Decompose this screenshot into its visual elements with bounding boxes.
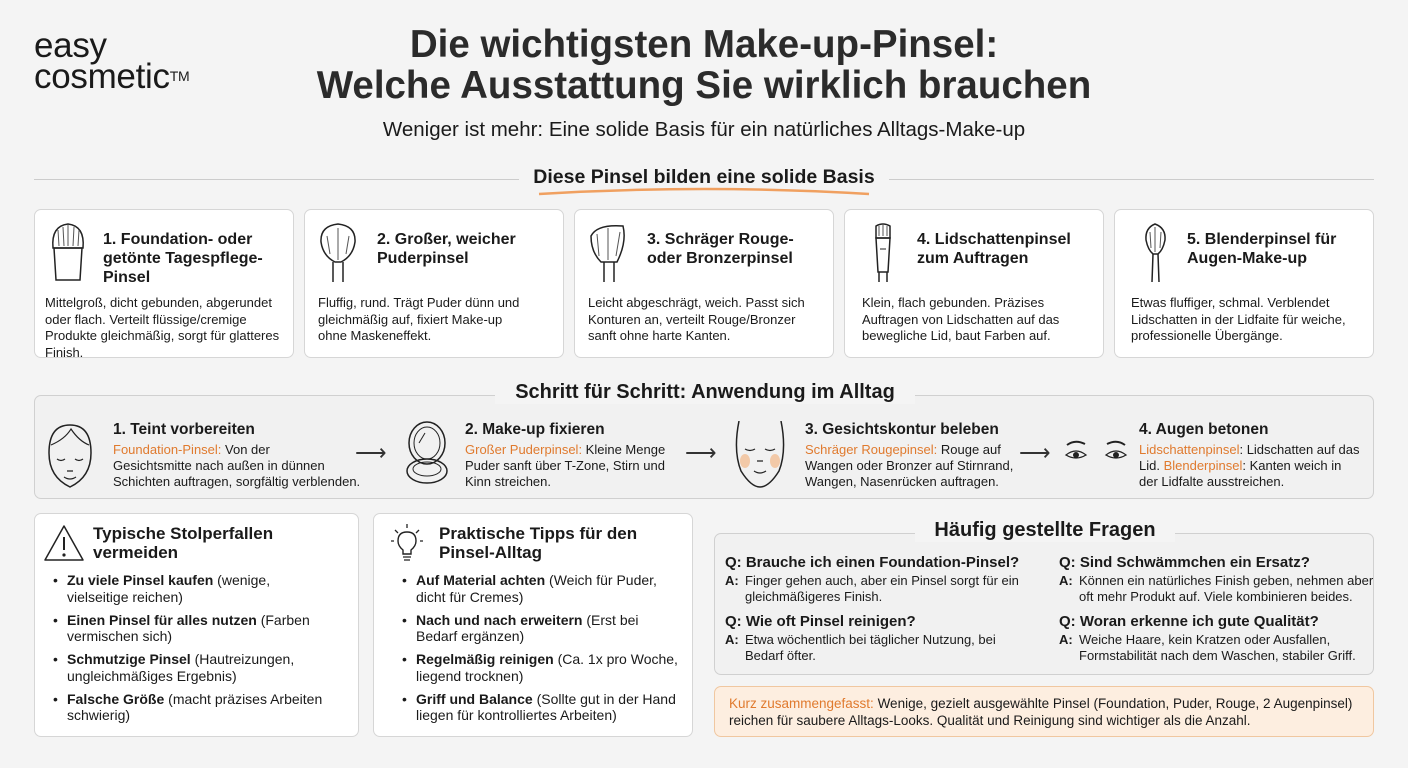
card 5: 5. Blenderpinsel für — [1187, 231, 1336, 248]
panel: tipps: Regelmäßig reinigen (Ca. 1x pro Woche, — [416, 651, 678, 667]
title: Welche Ausstattung Sie wirklich brauchen — [317, 64, 1091, 107]
step 1: 1. Teint vorbereiten — [113, 421, 255, 438]
arrow: ⟶ — [1019, 440, 1051, 465]
step 4: Lidschattenpinsel: Lidschatten auf das — [1139, 442, 1359, 457]
card 2 — [304, 209, 564, 358]
card 3 — [574, 209, 834, 358]
card 4 — [844, 209, 1104, 358]
step 3: Wangen oder Bronzer auf Stirnrand, — [805, 458, 1013, 473]
panel: FAQ — [714, 533, 1374, 675]
card 3: sanft ohne harte Kanten. — [588, 328, 730, 343]
icon: blender brush — [1145, 223, 1166, 282]
panel: tipps: liegend trocknen) — [416, 668, 523, 684]
step 4: Lid. Blenderpinsel: Kanten weich in — [1139, 458, 1341, 473]
summary callout: reichen für saubere Alltags-Looks. Qualität und Reinigung sind wichtiger als die Anzahl. — [729, 713, 1251, 728]
FAQ 4: Q: Woran erkenne ich gute Qualität? — [1059, 613, 1319, 630]
step 1: Foundation-Pinsel: Von der — [113, 442, 270, 457]
FAQ 4: Weiche Haare, kein Kratzen oder Ausfallen, — [1079, 632, 1330, 647]
step 1: Gesichtsmitte nach außen in dünnen — [113, 458, 325, 473]
panel: tipps: liegen für kontrolliertes Arbeiten) — [416, 707, 617, 723]
FAQ 3: Q: Sind Schwämmchen ein Ersatz? — [1059, 554, 1310, 571]
arrow: ⟶ — [355, 440, 387, 465]
card 3: Leicht abgeschrägt, weich. Passt sich — [588, 295, 805, 310]
step 3 — [736, 421, 1013, 489]
panel: stolperfallen: vielseitige reichen) — [67, 588, 183, 604]
card 1: Produkte gleichmäßig, sorgt für glatteres — [45, 328, 279, 343]
FAQ 2: Q: Wie oft Pinsel reinigen? — [725, 613, 916, 630]
FAQ 2 — [725, 613, 996, 662]
step 1: Schichten auftragen, sorgfältig verblenden. — [113, 474, 360, 489]
FAQ 2: A: — [725, 632, 739, 647]
card 4: zum Auftragen — [917, 250, 1028, 267]
panel: stolperfallen: Typische Stolperfallen — [93, 524, 273, 543]
card 1: 1. Foundation- oder — [103, 231, 252, 248]
summary callout — [714, 686, 1374, 737]
card 5: professionelle Übergänge. — [1131, 328, 1283, 343]
card 3: oder Bronzerpinsel — [647, 250, 793, 267]
FAQ 3 — [1059, 554, 1373, 604]
card 3: 3. Schräger Rouge- — [647, 231, 794, 248]
step 3: Wangen, Nasenrücken auftragen. — [805, 474, 999, 489]
FAQ 4: Formstabilität nach dem Waschen, stabiler Griff. — [1079, 648, 1356, 662]
panel: stolperfallen: Zu viele Pinsel kaufen (wenige, — [67, 572, 270, 588]
FAQ 1: Q: Brauche ich einen Foundation-Pinsel? — [725, 554, 1019, 571]
section heading: Basis: Diese Pinsel bilden eine solide Basis — [533, 166, 875, 188]
card 4: Klein, flach gebunden. Präzises — [862, 295, 1044, 310]
FAQ 3: A: — [1059, 573, 1073, 588]
panel: tipps: Nach und nach erweitern (Erst bei — [416, 612, 638, 628]
panel: stolperfallen — [34, 513, 359, 737]
icon: angled brush — [590, 225, 625, 282]
FAQ 1 — [725, 554, 1019, 604]
card 2: Fluffig, rund. Trägt Puder dünn und — [318, 295, 519, 310]
FAQ 3: oft mehr Produkt auf. Viele kombinieren beides. — [1079, 588, 1353, 604]
step 2: 2. Make-up fixieren — [465, 421, 605, 438]
icon: lightbulb — [391, 524, 423, 561]
arrow: ⟶ — [685, 440, 717, 465]
icon: warning — [44, 525, 84, 561]
step 2: Puder sanft über T-Zone, Stirn und — [465, 458, 665, 473]
step 3: 3. Gesichtskontur beleben — [805, 421, 999, 438]
step 4: 4. Augen betonen — [1139, 421, 1268, 438]
card 4: 4. Lidschattenpinsel — [917, 231, 1071, 248]
panel: stolperfallen: Einen Pinsel für alles nutzen (Farben — [67, 612, 310, 628]
panel: tipps: dicht für Cremes) — [416, 588, 523, 604]
FAQ 1: gleichmäßigeres Finish. — [745, 588, 882, 604]
panel: tipps — [373, 513, 693, 737]
card 5 — [1114, 209, 1374, 358]
FAQ 1: Finger gehen auch, aber ein Pinsel sorgt für ein — [745, 573, 1019, 588]
icon: eyeshadow brush — [875, 223, 891, 282]
step 2 — [406, 421, 665, 489]
panel: stolperfallen: ungleichmäßiges Ergebnis) — [67, 668, 237, 684]
card 5: Lidschatten in der Lidfaite für weiche, — [1131, 312, 1346, 326]
logo — [34, 26, 189, 96]
FAQ 2: Bedarf öfter. — [745, 648, 816, 662]
card 2: Puderpinsel — [377, 250, 469, 267]
panel: steps — [34, 395, 1374, 499]
panel: tipps: Bedarf ergänzen) — [416, 628, 524, 644]
FAQ 1: A: — [725, 573, 739, 588]
panel: tipps: Pinsel-Alltag — [439, 543, 542, 562]
FAQ 3: Können ein natürliches Finish geben, nehmen aber — [1079, 573, 1373, 588]
title: Die wichtigsten Make-up-Pinsel: — [410, 23, 998, 66]
card 5: Etwas fluffiger, schmal. Verblendet — [1131, 295, 1329, 310]
FAQ 4: A: — [1059, 632, 1073, 647]
FAQ heading: Häufig gestellte Fragen — [934, 519, 1156, 541]
card 3: Konturen an, verteilt Rouge/Bronzer — [588, 312, 795, 326]
card 1: Mittelgroß, dicht gebunden, abgerundet — [45, 295, 272, 310]
card 1: Finish. — [45, 344, 83, 360]
icon: foundation brush — [52, 223, 84, 281]
section heading: Basis — [34, 166, 1374, 196]
panel: stolperfallen: vermischen sich) — [67, 628, 172, 644]
panel: stolperfallen: Schmutzige Pinsel (Hautreizungen, — [67, 651, 294, 667]
card 2: 2. Großer, weicher — [377, 231, 516, 248]
logo: easy — [34, 26, 107, 65]
icon: powder brush — [320, 223, 356, 282]
title — [316, 23, 1091, 107]
card 2: ohne Maskeneffekt. — [318, 328, 431, 343]
FAQ 2: Etwa wöchentlich bei täglicher Nutzung, bei — [745, 632, 996, 647]
card 2: gleichmäßig auf, fixiert Make-up — [318, 312, 502, 326]
step 4 — [1065, 421, 1359, 489]
step 4: der Lidfalte ausstreichen. — [1139, 474, 1284, 489]
card 1: getönte Tagespflege- — [103, 250, 263, 267]
summary callout: Kurz zusammengefasst: Wenige, gezielt ausgewählte Pinsel (Foundation, Puder, Rouge, 2 Augenpinsel) — [729, 696, 1352, 711]
panel: stolperfallen: Falsche Größe (macht präzises Arbeiten — [67, 690, 322, 706]
card 1 — [34, 209, 294, 358]
step 2: Kinn streichen. — [465, 474, 551, 489]
step 2: Großer Puderpinsel: Kleine Menge — [465, 442, 665, 457]
panel: tipps: Auf Material achten (Weich für Puder, — [416, 572, 657, 588]
panel: stolperfallen: vermeiden — [93, 543, 178, 562]
step 3: Schräger Rougepinsel: Rouge auf — [805, 442, 1001, 457]
step 1 — [48, 421, 360, 489]
card 1: Pinsel — [103, 269, 150, 286]
card 5: Augen-Make-up — [1187, 250, 1307, 267]
card 4: bewegliche Lid, baut Farben auf. — [862, 328, 1051, 343]
card 1: oder flach. Verteilt flüssige/cremige — [45, 312, 247, 326]
steps heading: Schritt für Schritt: Anwendung im Alltag — [515, 381, 895, 403]
panel: tipps: Griff und Balance (Sollte gut in der Hand — [416, 690, 676, 706]
FAQ 4 — [1059, 613, 1356, 662]
logo: cosmeticTM — [34, 57, 189, 96]
subtitle: Weniger ist mehr: Eine solide Basis für ein natürliches Alltags-Make-up — [383, 118, 1025, 141]
panel: stolperfallen: schwierig) — [67, 707, 130, 723]
panel: tipps: Praktische Tipps für den — [439, 524, 637, 543]
card 4: Auftragen von Lidschatten auf das — [862, 312, 1059, 326]
